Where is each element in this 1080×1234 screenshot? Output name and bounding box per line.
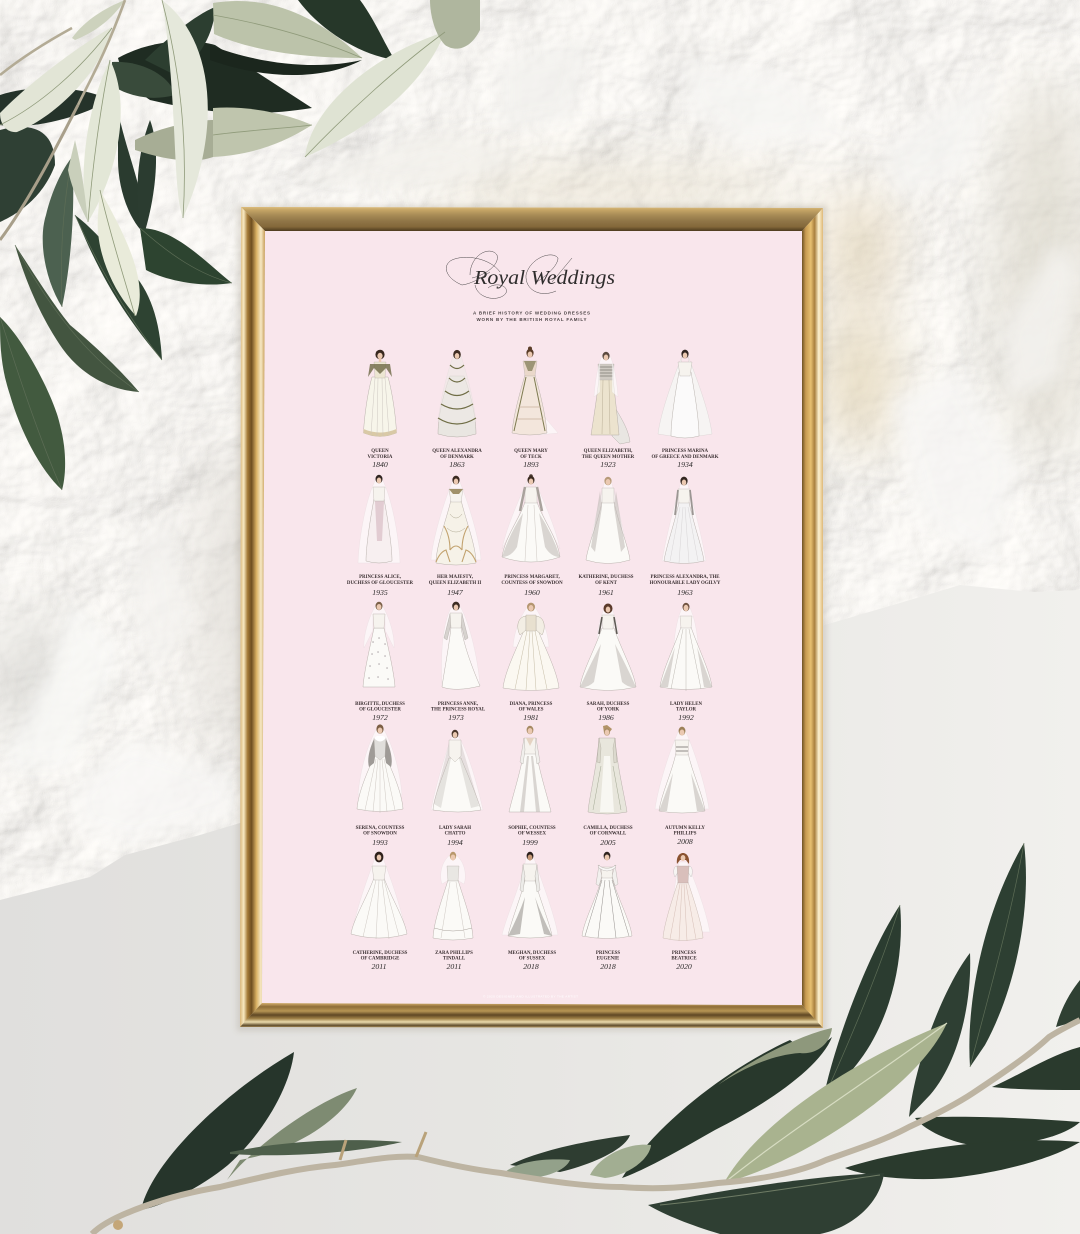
caption: DUCHESS OF GLOUCESTER [347,581,414,586]
caption: EUGENIE [597,956,620,962]
caption: HONOURABLE LADY OGILVY [650,581,721,586]
caption: OF CAMBRIDGE [361,956,400,962]
caption: BEATRICE [671,956,697,962]
year: 1935 [372,588,388,597]
year: 1992 [678,713,694,722]
dress illustration: Princess Alexandra [662,477,706,564]
caption: QUEEN ALEXANDRA [432,449,482,454]
year: 1999 [522,838,538,847]
year: 1947 [447,588,464,597]
dress illustration: Zara Phillips [433,852,473,940]
caption: OF WALES [519,708,544,712]
year: 1986 [598,713,614,722]
caption: QUEEN MARY [514,449,548,454]
year: 1863 [449,460,465,469]
caption: VICTORIA [368,455,393,460]
dress illustration: Catherine [351,852,407,939]
year: 1972 [372,713,388,722]
caption: CATHERINE, DUCHESS [353,951,408,956]
year: 1840 [372,460,388,469]
dress illustration: Queen Elizabeth II [431,476,481,565]
year: 1963 [677,588,693,597]
caption: QUEEN ELIZABETH, [584,449,633,454]
entry: Her Majesty, Queen Elizabeth II 1947 [429,476,481,597]
dress illustration: Princess Marina [658,350,712,438]
entry: Katherine, Duchess of Kent 1961 [578,477,634,597]
caption: OF CORNWALL [590,832,627,836]
entry: Queen Alexandra of Denmark 1863 [432,350,482,469]
footer credit: © 2020 DESIGNED AND ILLUSTRATED BY THE ARTIST [483,994,578,998]
caption: MEGHAN, DUCHESS [508,951,556,956]
caption: SARAH, DUCHESS [587,702,630,707]
caption: OF DENMARK [440,455,474,460]
caption: PRINCESS ALICE, [359,575,402,580]
caption: THE QUEEN MOTHER [582,455,635,460]
caption: BIRGITTE, DUCHESS [355,702,405,707]
dress illustration: Princess Margaret [502,474,560,562]
entry: Lady Sarah Chatto 1994 [431,730,483,847]
caption: PRINCESS MARINA [662,449,708,454]
caption: OF WESSEX [518,832,547,836]
caption: LADY SARAH [439,826,471,831]
entry: Birgitte, Duchess of Gloucester 1972 [355,602,405,722]
caption: QUEEN [371,449,389,454]
caption: CAMILLA, DUCHESS [583,826,633,831]
olive branch: bottom right [92,843,1080,1234]
caption: AUTUMN KELLY [665,826,705,831]
caption: QUEEN ELIZABETH II [429,581,481,586]
dress illustration: Lady Sarah Chatto [431,730,483,812]
year: 2011 [446,962,462,971]
dress illustration: Katherine, Duchess of Kent [586,477,630,564]
entry: Princess Marina of Greece and Denmark 1934 [651,350,719,469]
dress illustration: Lady Helen Taylor [660,603,712,691]
dress illustration: Autumn Kelly Phillips [655,727,709,813]
dress illustration: Princess Alice [358,475,400,563]
entry: Sarah, Duchess of York 1986 [580,604,636,722]
dress illustration: Queen Alexandra [438,350,476,437]
year: 1961 [598,588,614,597]
caption: SERENA, COUNTESS [356,826,405,831]
entry: Queen Victoria 1840 [364,350,396,469]
dress illustration: Princess Beatrice [663,853,710,941]
caption: PHILLIPS [674,832,697,836]
caption: PRINCESS MARGARET, [504,575,560,580]
caption: TAYLOR [676,708,697,712]
caption: OF GREECE AND DENMARK [651,455,719,460]
caption: COUNTESS OF SNOWDON [501,581,563,586]
caption: OF SUSSEX [519,956,546,962]
entry: Autumn Kelly Phillips 2008 [655,727,709,846]
background: crumpled white paper [0,0,1080,910]
dress illustration: Diana [503,603,559,690]
entry: Sophie, Countess of Wessex 1999 [508,726,556,847]
caption: HER MAJESTY, [437,575,474,580]
entry: Serena, Countess of Snowdon 1993 [356,724,405,847]
dress illustration: Sophie [509,726,551,812]
entry: Princess Alexandra, the Honourable Lady Ogilvy 1963 [650,477,721,597]
entry: Meghan, Duchess of Sussex 2018 [502,852,558,971]
caption: PRINCESS ALEXANDRA, THE [650,575,720,580]
year: 1893 [523,460,539,469]
entry: Catherine, Duchess of Cambridge 2011 [351,852,408,971]
dress illustration: Queen Victoria [364,350,396,436]
year: 2008 [677,837,693,846]
caption: KATHERINE, DUCHESS [578,575,634,580]
year: 1981 [523,713,539,722]
caption: CHATTO [445,832,466,836]
dress illustration: Queen Mary [512,346,558,435]
dress illustration: Serena [357,724,403,813]
dress illustration: Queen Elizabeth, the Queen Mother [591,352,630,444]
dress illustration: Princess Eugenie [582,852,632,938]
title: Royal Weddings: Royal Weddings [473,267,615,289]
entry: Lady Helen Taylor 1992 [660,603,712,722]
entry: Princess Margaret, Countess of Snowdon 1960 [501,474,563,597]
dress illustration: Meghan [502,852,558,938]
year: 1923 [600,460,616,469]
caption: TINDALL [443,956,466,962]
caption: DIANA, PRINCESS [510,702,553,707]
entry: Princess Alice, Duchess of Gloucester 1935 [347,475,414,597]
year: 2018 [600,962,616,971]
caption: OF TECK [520,455,542,460]
dress illustration: Birgitte [363,602,395,687]
year: 2011 [371,962,387,971]
year: 1973 [448,713,464,722]
year: 1960 [524,588,540,597]
dress illustration: Camilla [588,725,627,814]
entry: Camilla, Duchess of Cornwall 2005 [583,725,633,847]
caption: PRINCESS [596,951,620,956]
caption: OF GLOUCESTER [359,708,401,712]
caption: SOPHIE, COUNTESS [508,826,556,831]
year: 2005 [600,838,616,847]
year: 2020 [676,962,692,971]
entry: Diana, Princess of Wales 1981 [503,603,559,722]
dress illustration: Sarah, Duchess of York [580,604,636,690]
caption: OF SNOWDON [363,832,397,836]
gold picture frame [240,207,823,1028]
pink poster panel [262,231,802,1005]
caption: OF YORK [597,708,619,712]
subtitle: WORN BY THE BRITISH ROYAL FAMILY [476,317,586,322]
caption: LADY HELEN [670,702,702,707]
entry: Princess Eugenie 2018 [582,852,632,971]
year: 1994 [447,838,463,847]
entry: Zara Phillips Tindall 2011 [433,852,473,971]
caption: THE PRINCESS ROYAL [431,708,486,712]
entry: Princess Anne, the Princess Royal 1973 [431,602,486,722]
title: Royal Weddings [446,251,615,298]
year: 2018 [523,962,539,971]
entry: Princess Beatrice 2020 [663,853,710,971]
caption: ZARA PHILLIPS [435,951,473,956]
olive branch: top left [0,0,480,490]
subtitle: A BRIEF HISTORY OF WEDDING DRESSES [473,310,590,316]
caption: PRINCESS [672,951,696,956]
year: 1934 [677,460,693,469]
dress illustration: Princess Anne [441,602,480,689]
caption: PRINCESS ANNE, [438,702,479,707]
caption: OF KENT [595,581,618,586]
entry: Queen Elizabeth, the Queen Mother 1923 [582,352,635,469]
year: 1993 [372,838,388,847]
frame shadow on the wall [237,205,827,1031]
entry: Queen Mary of Teck 1893 [512,346,558,469]
